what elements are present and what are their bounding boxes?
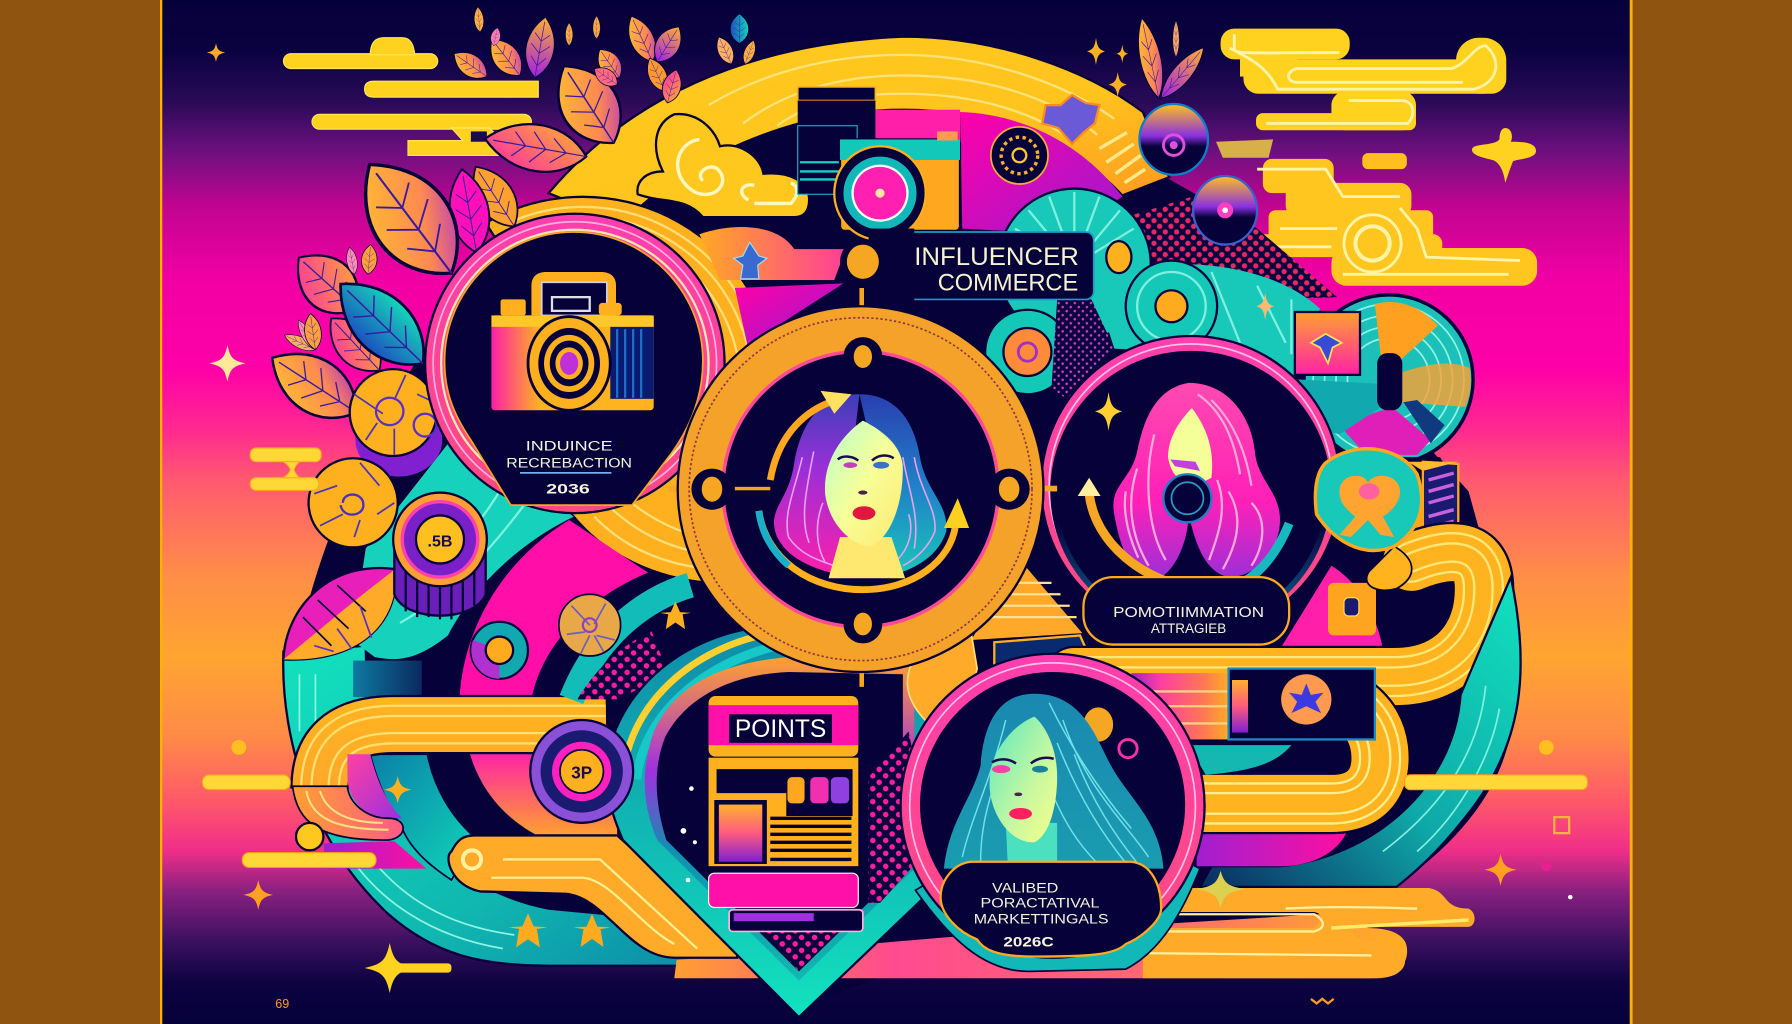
teal disc with gold dot	[1126, 261, 1217, 352]
center ring panel	[669, 288, 1057, 687]
small white stars	[681, 786, 697, 882]
halftone pink	[577, 631, 669, 699]
sparkle stars	[207, 43, 1517, 993]
lower bottom orange strip	[674, 913, 1407, 978]
pink hole inside U loop	[347, 754, 402, 818]
arrow: teal curve	[1214, 523, 1289, 597]
small glyph marks	[231, 740, 1573, 1011]
teal centre-left swoosh	[352, 432, 574, 659]
title label box: COMMERCE	[938, 269, 1078, 296]
left yellow U loop	[320, 725, 606, 789]
rainbow arc	[623, 634, 766, 777]
label	[1083, 577, 1289, 645]
book next to heart	[1394, 462, 1458, 571]
navy interior	[657, 672, 903, 971]
label text	[506, 438, 632, 497]
arrow: gold curve	[1078, 478, 1201, 590]
outer pink ring	[425, 214, 725, 513]
top-left yellow cloud lines	[283, 38, 538, 155]
U loop tail	[293, 786, 403, 840]
teal fan	[998, 189, 1151, 342]
gold chip with ribbed base: .5B	[428, 533, 452, 550]
shell disc	[559, 594, 621, 656]
label	[941, 862, 1161, 957]
label: MARKETTINGALS	[974, 911, 1109, 926]
small gold bar near lenses	[1216, 139, 1273, 158]
top lens ball	[1139, 104, 1208, 175]
small teal ring disc	[985, 310, 1070, 394]
big yellow arc band	[549, 37, 1169, 223]
pink ring	[901, 654, 1205, 958]
navy disc	[1056, 357, 1326, 626]
gold chip with ribbed base	[393, 493, 487, 619]
navy blue frame near stripes	[994, 635, 1097, 674]
magenta strip lower right	[1197, 833, 1346, 866]
label: VALIBED	[992, 881, 1058, 896]
label: POMOTIIMMATION	[1113, 605, 1264, 621]
pin-shaped poster frame	[606, 626, 954, 1017]
panel: bottom influencer	[901, 654, 1205, 958]
small curl on yellow loop	[1367, 546, 1412, 590]
decor dot	[1083, 707, 1113, 742]
diagonal teal band	[571, 585, 690, 699]
dash	[735, 487, 770, 490]
body navy silhouette	[295, 95, 1511, 1006]
left leaf cluster	[258, 141, 529, 435]
panel: right influencer	[1041, 336, 1341, 645]
small ribbed coin top	[350, 369, 442, 477]
big curved yellow puff cloud on arc	[637, 114, 809, 217]
teal hair woman	[944, 694, 1163, 869]
right yellow star	[1472, 128, 1536, 183]
orange-purple inner rim	[645, 657, 914, 981]
left small yellow squiggle	[250, 448, 321, 490]
small glyph marks: 69	[275, 997, 289, 1011]
small gradient disc	[471, 622, 528, 679]
label text: 2036	[546, 482, 590, 497]
poster title: POINTS	[735, 715, 826, 743]
magenta wedge lower right	[1280, 566, 1383, 649]
square icon	[1295, 312, 1360, 375]
camera at top	[798, 87, 960, 240]
magenta wedge under arc	[960, 112, 1122, 234]
yellow ball	[296, 823, 323, 850]
label: ATTRAGIEB	[1151, 621, 1226, 636]
orange curl behind panel	[907, 634, 977, 731]
striped colour strip	[1131, 673, 1230, 739]
left yellow bars	[202, 775, 376, 867]
lower left yellow scroll	[448, 835, 737, 958]
navy centre	[725, 353, 997, 625]
magenta wedge below ribbon	[735, 283, 843, 345]
panel: left camera	[425, 214, 725, 513]
navy label body	[445, 232, 703, 505]
ribbon with star icon	[699, 227, 846, 280]
arrow: top arc	[770, 391, 851, 480]
bottom-left leaf	[283, 568, 396, 660]
label: 2026C	[1003, 934, 1054, 949]
pink hair woman	[1113, 383, 1280, 579]
pink stripes below yellow loop	[470, 753, 617, 835]
halftone tip	[763, 931, 840, 971]
orange triangular stripes between center ring and panel	[971, 557, 1082, 640]
purple sliver under ball	[323, 841, 426, 869]
pink ring	[1041, 336, 1341, 635]
right long yellow bar	[1405, 775, 1587, 790]
halftone red region	[1126, 194, 1337, 299]
label text: RECREBACTION	[506, 455, 632, 470]
star badge	[1042, 95, 1099, 144]
decor ring	[1119, 739, 1137, 758]
title label box: INFLUENCER	[914, 243, 1079, 271]
bottom-right yellow cloud	[1143, 888, 1475, 978]
top leaf cluster	[448, 7, 759, 179]
lower-right yellow loop	[1200, 706, 1380, 803]
faint sparkle on cloud	[1195, 871, 1246, 907]
top-right yellow cloud	[1221, 29, 1506, 130]
right side bar	[1632, 0, 1792, 1024]
gold sparkle in teal loop	[384, 776, 411, 803]
halftone right of poster	[869, 731, 931, 903]
navy block behind lower right	[1257, 457, 1474, 686]
teal accent below strip	[1189, 745, 1291, 775]
left side bar	[0, 0, 161, 1024]
gold star	[1095, 392, 1122, 431]
label text: INDUINCE	[526, 438, 613, 453]
poster	[709, 696, 863, 931]
navy disc	[920, 672, 1185, 937]
right big yellow loop	[1074, 553, 1483, 677]
gold sparkle	[1256, 293, 1274, 320]
spiral coin	[309, 458, 398, 547]
second lens ball	[1193, 176, 1257, 245]
heart badge	[1315, 449, 1422, 550]
gold ring	[678, 306, 1043, 672]
gold stars in teal	[509, 913, 611, 947]
icon: yellow camera	[491, 272, 654, 410]
left teal loop	[283, 646, 754, 966]
knobs	[691, 337, 1030, 643]
title label box	[869, 229, 1094, 304]
gold small tile	[1328, 583, 1376, 635]
small knob by title	[1106, 241, 1131, 273]
yellow-orange disc behind left panel	[486, 197, 777, 583]
woman portrait	[774, 394, 946, 578]
middle-right yellow cloud	[1251, 159, 1537, 286]
arrow: bottom arc	[759, 498, 969, 590]
teal pin outline	[606, 626, 954, 1017]
halftone purple	[1051, 299, 1114, 400]
emblem circle	[991, 127, 1048, 184]
teal body beside title	[1097, 257, 1320, 377]
lower-left gold chip: 3P	[571, 762, 592, 782]
tick marks	[669, 288, 1057, 687]
small diamonds	[1087, 38, 1128, 97]
magenta arch	[459, 520, 648, 699]
dark teal block	[353, 661, 422, 697]
label: PORACTATIVAL	[981, 895, 1100, 910]
gold star	[660, 602, 691, 629]
middle teal band lower left	[370, 754, 475, 880]
lower-left gold chip	[530, 720, 633, 823]
teal crescent under bottom panel	[915, 800, 1200, 971]
right teal swoosh	[1200, 577, 1521, 887]
vinyl disc	[1297, 295, 1473, 464]
dark screen box with flower	[1229, 669, 1375, 739]
small top-right leaves	[1132, 16, 1211, 104]
star tail bar	[389, 963, 451, 973]
knob by title	[840, 239, 886, 285]
yellow pill	[1362, 153, 1407, 169]
